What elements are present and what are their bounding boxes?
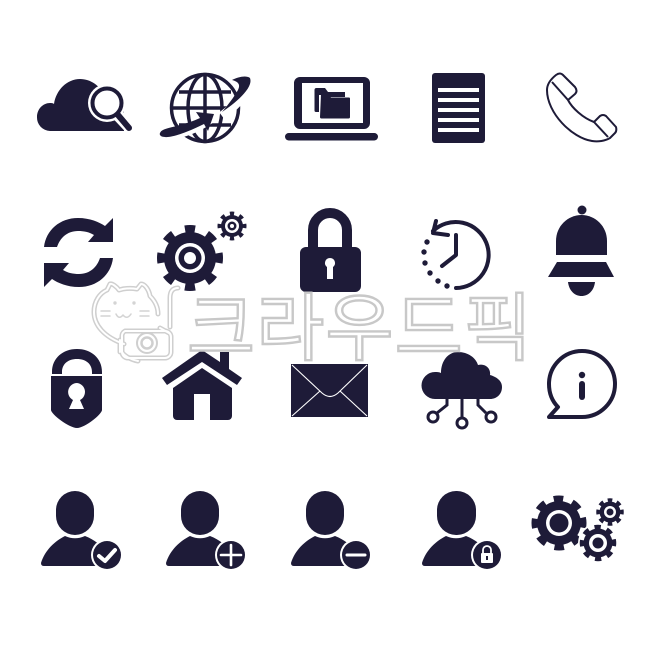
icon: sync arrows [44,218,113,287]
watermark: brand text: 크라우드픽 [187,287,532,370]
icon: settings gears [161,214,244,287]
icon: user remove [291,491,372,571]
icon: document [432,73,485,143]
icon: cloud network [422,352,502,428]
icon: telephone handset [547,74,616,141]
icon: envelope [291,364,368,417]
icon: user lock [422,491,503,571]
icon: globe with orbit arrow [160,74,251,142]
icon: info speech bubble [549,351,615,417]
icon: cloud search [37,79,132,131]
icon: bell [548,206,614,296]
icon: user add [166,491,247,571]
icon: padlock [300,213,361,292]
watermark: cat with camera logo [94,284,178,361]
icon: shield lock [51,349,102,428]
icon: house [162,350,242,420]
icon: laptop with folders [285,77,378,140]
icon: user check [41,491,123,571]
icon: history clock [421,221,489,289]
icon: three gears [534,498,622,563]
